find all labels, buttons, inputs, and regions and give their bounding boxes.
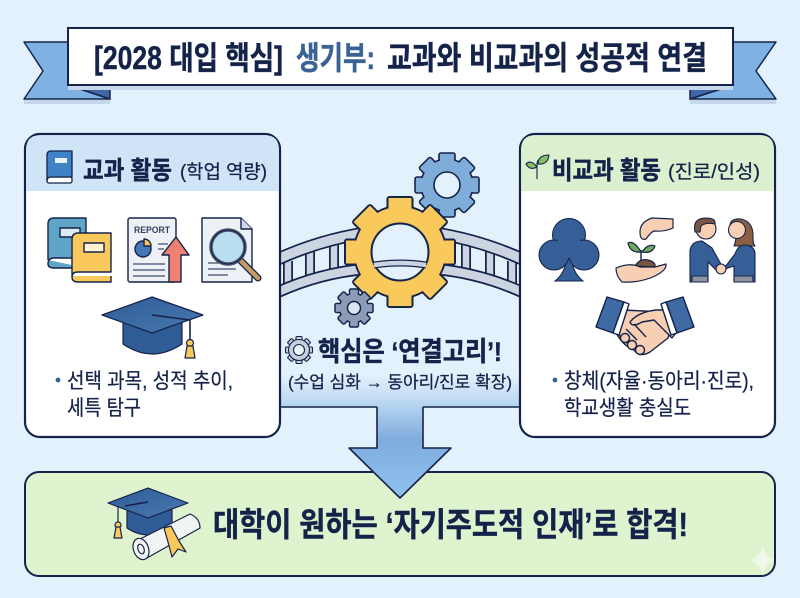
gear: large yellow centre [345,197,455,307]
icon: hands planting seedling [616,218,673,282]
icon: stacked books [48,218,111,282]
caption subtext: (수업 심화 → 동아리/진로 확장) [288,373,512,392]
icon: report with upward arrow: REPORT [134,225,170,235]
left heading: 교과 활동 [83,157,172,185]
icon: cap and diploma [108,488,200,562]
arrow: down to outcome [349,407,451,498]
icon: report with upward arrow [128,218,189,282]
left heading note: (학업 역량) [180,161,267,183]
centre caption: key is the link [286,336,512,392]
right bullet text [553,370,754,420]
icon: graduation cap [102,297,203,358]
right bullet text: 학교생활 충실도 [564,397,691,420]
icon: sprout [526,155,549,179]
title text [94,40,707,76]
banner left ribbon tail [24,42,110,104]
icon: document with magnifier [202,218,258,282]
gear: small grey [335,289,373,327]
left bullet text [56,370,233,420]
icon: sparkle [750,545,774,576]
caption heading: 핵심은 ‘연결고리’! [318,337,502,367]
gear: blue upper [415,153,479,217]
panel: outcome banner [25,472,775,576]
right panel header band [521,135,774,191]
right heading: 비교과 활동 [552,157,661,185]
banner right ribbon tail [690,42,776,104]
centre connector backdrop [279,375,521,407]
icon: big handshake [596,297,694,355]
left bullet text: 선택 과목, 성적 추이, [67,370,233,393]
title text: [2028 대입 핵심] [94,40,283,76]
icon: small outline gear [286,336,312,364]
title banner [24,28,776,104]
bridge left span [278,233,365,292]
outcome text: 대학이 원하는 ‘자기주도적 인재’로 합격! [213,506,688,543]
icon: header book [47,151,72,183]
panel: curricular activities [25,134,280,437]
banner white plate [68,28,733,85]
title text: 생기부: [296,40,375,76]
left bullet text: 세특 탐구 [67,397,141,420]
bridge linking the panels [278,233,522,292]
title text: 교과와 비교과의 성공적 연결 [387,40,707,76]
panel: extracurricular activities [520,134,775,437]
right heading note: (진로/인성) [668,161,760,183]
woman [730,219,755,246]
man [690,241,722,282]
icon: two people shaking hands [690,218,755,282]
left panel header band [26,135,279,191]
right bullet text: 창체(자율·동아리·진로), [564,370,754,393]
icon: club symbol [539,218,599,281]
bridge right span [435,233,522,292]
